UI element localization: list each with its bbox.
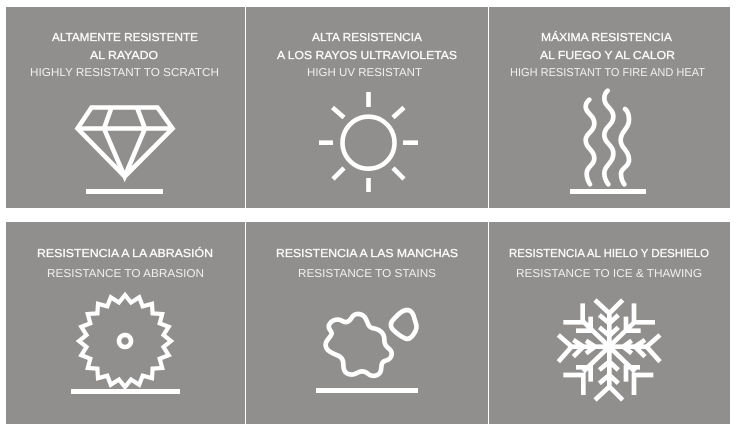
- heading: UV resistance: HIGH UV RESISTANT: [307, 67, 422, 79]
- icon: heat waves: [570, 91, 646, 194]
- heading: UV resistance: [277, 32, 457, 79]
- heading: ice and thawing resistance: RESISTANCE TO ICE & THAWING: [516, 268, 702, 280]
- heading: scratch resistance: ALTAMENTE RESISTENTE: [52, 32, 198, 44]
- panel: stain resistance: [246, 222, 488, 424]
- panel: scratch resistance: [6, 7, 245, 208]
- panel: ice and thawing resistance: [489, 222, 730, 424]
- heading: fire and heat resistance: AL FUEGO Y AL CALOR: [540, 50, 675, 62]
- heading: abrasion resistance: RESISTANCE TO ABRASION: [47, 268, 204, 280]
- icon: diamond: [78, 108, 172, 194]
- panel: UV resistance: [246, 7, 488, 208]
- icon: snowflake: [558, 300, 660, 400]
- icon: stains: [316, 310, 418, 393]
- heading: stain resistance: RESISTENCIA A LAS MANCHAS: [276, 248, 458, 260]
- heading: ice and thawing resistance: RESISTENCIA AL HIELO Y DESHIELO: [509, 248, 709, 260]
- heading: abrasion resistance: RESISTENCIA A LA ABRASIÓN: [37, 247, 213, 260]
- panel: fire and heat resistance: [489, 7, 730, 208]
- heading: stain resistance: [276, 248, 458, 280]
- heading: fire and heat resistance: [510, 31, 705, 79]
- heading: scratch resistance: HIGHLY RESISTANT TO SCRATCH: [30, 67, 219, 79]
- icon: sun: [319, 92, 418, 192]
- icon: saw blade: [71, 295, 180, 394]
- heading: UV resistance: ALTA RESISTENCIA: [312, 32, 422, 44]
- heading: fire and heat resistance: MÁXIMA RESISTENCIA: [541, 31, 672, 44]
- heading: scratch resistance: AL RAYADO: [90, 50, 158, 62]
- heading: fire and heat resistance: HIGH RESISTANT TO FIRE AND HEAT: [510, 67, 705, 79]
- heading: ice and thawing resistance: [509, 248, 709, 280]
- heading: abrasion resistance: [37, 247, 213, 280]
- panel: abrasion resistance: [6, 222, 245, 424]
- heading: stain resistance: RESISTANCE TO STAINS: [298, 268, 436, 280]
- heading: UV resistance: A LOS RAYOS ULTRAVIOLETAS: [277, 50, 457, 62]
- heading: scratch resistance: [30, 32, 219, 79]
